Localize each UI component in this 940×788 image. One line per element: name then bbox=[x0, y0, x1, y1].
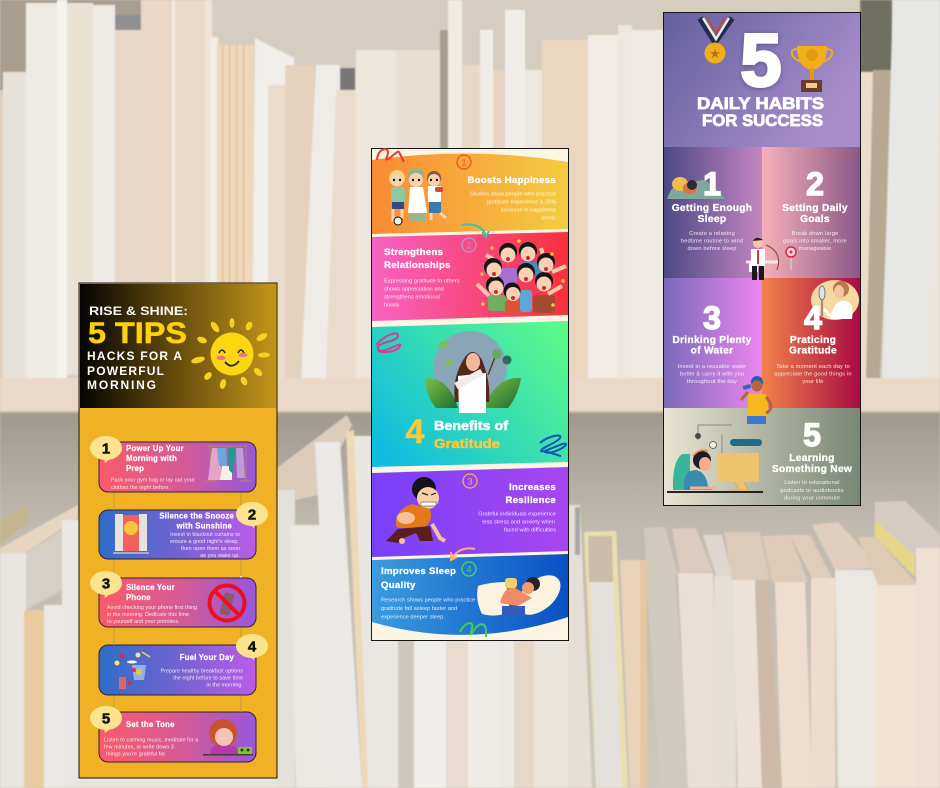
tip card 4 bbox=[99, 645, 256, 695]
habit 5: podcasts or audiobooks bbox=[780, 488, 844, 494]
habit 5: Learning bbox=[789, 453, 835, 464]
heading: rise and shine: 5 TIPS bbox=[88, 317, 187, 350]
icon: girl with radio bbox=[203, 719, 253, 756]
icon: curtained window bbox=[113, 514, 149, 554]
heading: daily habits for success: FOR SUCCESS bbox=[702, 111, 823, 130]
habit 2 bbox=[762, 147, 860, 278]
tip card 5: things you're grateful for. bbox=[106, 752, 167, 758]
icon: no phone bbox=[210, 586, 244, 620]
heading: rise and shine: HACKS FOR A bbox=[87, 349, 182, 363]
number badges bbox=[90, 436, 268, 733]
lower wall bbox=[0, 413, 940, 788]
icon: woman with mirror bbox=[811, 280, 859, 320]
band: increases resilience: faced with difficulties bbox=[504, 528, 556, 534]
decorative scribbles and arrows bbox=[377, 149, 489, 637]
scribble green bbox=[460, 623, 486, 637]
habit 2: Break down large bbox=[792, 231, 838, 237]
number circles bbox=[457, 155, 477, 576]
band: strengthens relationships: Expressing gratitude to others bbox=[384, 278, 460, 284]
number circles: 3 bbox=[467, 476, 473, 486]
band: increases resilience: Grateful individuals experience bbox=[478, 512, 556, 518]
tip card 3: Phone bbox=[126, 593, 151, 602]
habit 4: Gratitude bbox=[789, 346, 837, 356]
band: increases resilience: Resilience bbox=[506, 495, 556, 506]
tip card 1: Power Up Your bbox=[126, 444, 184, 453]
bottom shelf centre books bbox=[372, 505, 647, 788]
tip card 4: the night before to save time bbox=[173, 676, 243, 682]
band: improves sleep quality: Research shows people who practice bbox=[381, 598, 475, 604]
habit 2: manageable bbox=[799, 246, 831, 252]
header band bbox=[80, 284, 276, 408]
decorative scribble pink bbox=[376, 333, 400, 352]
arrow peach bbox=[451, 548, 475, 560]
habit 3 bbox=[664, 278, 762, 408]
bottom shelf right books bbox=[644, 501, 940, 788]
habit 2: 2 bbox=[806, 166, 824, 202]
band: strengthens relationships: shows appreciation and bbox=[384, 286, 444, 292]
scribble red bbox=[377, 149, 404, 162]
habit 2: Goals bbox=[800, 214, 830, 225]
heading: rise and shine: POWERFUL bbox=[87, 364, 164, 378]
icon: three friends bbox=[389, 168, 446, 225]
illustration: learner at computer bbox=[667, 425, 763, 493]
band: strengthens relationships: Relationships bbox=[384, 260, 451, 271]
habit 5 bbox=[664, 408, 860, 505]
band: increases resilience: less stress and anxiety when bbox=[482, 520, 555, 526]
habit 5: during your commute bbox=[784, 496, 840, 502]
connector lines bbox=[113, 492, 242, 713]
band: improves sleep quality: gratitude fall asleep faster and bbox=[381, 606, 457, 612]
tip card 3: Silence Your bbox=[126, 583, 175, 592]
panel: 5 daily habits for success bbox=[664, 12, 860, 506]
band: improves sleep quality: Quality bbox=[381, 580, 416, 591]
tip card 2: Invest in blackout curtains to bbox=[170, 532, 240, 538]
band: strengthens relationships: strengthens emotional bbox=[384, 294, 440, 300]
habit 3: Invest in a reusable water bbox=[678, 364, 746, 370]
header bbox=[664, 13, 860, 147]
habit 1: 1 bbox=[703, 166, 721, 202]
tip card 4: in the morning. bbox=[206, 682, 243, 688]
illustration: sleeping person bbox=[477, 567, 568, 623]
tip card 5: Listen to calming music, meditate for a bbox=[104, 738, 198, 744]
icon: target bbox=[786, 247, 796, 270]
title: 4 benefits of gratitude: Gratitude bbox=[434, 436, 500, 451]
number badges: 4 bbox=[248, 638, 257, 656]
heading: daily habits for success bbox=[697, 94, 824, 130]
tip card 1 bbox=[99, 442, 256, 492]
habit 1: Sleep bbox=[698, 214, 726, 225]
band: increases resilience bbox=[372, 467, 568, 557]
band: boosts happiness: Boosts Happiness bbox=[468, 175, 556, 186]
habit 4 bbox=[762, 278, 860, 408]
habit 1: down before sleep bbox=[687, 246, 737, 252]
heading: rise and shine: MORNING bbox=[87, 378, 156, 392]
band: increases resilience: Increases bbox=[509, 482, 556, 493]
tip card 2: Silence the Snooze bbox=[159, 512, 234, 520]
heading: rise and shine bbox=[87, 304, 188, 392]
heading: rise and shine: RISE & SHINE: bbox=[89, 304, 188, 318]
tip card 2: then open them as soon bbox=[181, 546, 240, 552]
habit 2: Setting Daily bbox=[782, 203, 848, 214]
top shelf books bbox=[0, 0, 940, 380]
band: title and hugging woman bbox=[372, 321, 568, 467]
tip card 5 bbox=[99, 712, 256, 762]
panel: rise and shine tips bbox=[79, 283, 277, 778]
title: 4 benefits of gratitude: 4 bbox=[406, 413, 425, 451]
icon: smoothie ingredients bbox=[114, 652, 150, 689]
number circles: 2 bbox=[466, 240, 472, 250]
tip card 4: Prepare healthy breakfast options bbox=[160, 668, 243, 674]
number circles: 1 bbox=[461, 158, 467, 168]
bottom shelf left books bbox=[0, 415, 372, 788]
tip card 3: Avoid checking your phone first thing bbox=[107, 605, 197, 611]
habit 2: goals into smaller, more bbox=[783, 238, 847, 244]
tip card 2: with Sunshine bbox=[176, 522, 232, 530]
decorative scribble blue bbox=[540, 436, 566, 456]
band: boosts happiness: Studies show people who practice bbox=[470, 192, 556, 198]
habit 3: bottle & carry it with you bbox=[680, 372, 744, 378]
icon: medal: ★ bbox=[709, 46, 721, 61]
habit 5: Something New bbox=[772, 464, 852, 475]
habit 5: Listen to educational bbox=[784, 480, 840, 486]
band: improves sleep quality: experience deeper sleep. bbox=[381, 614, 445, 620]
tip card 4: Fuel Your Day bbox=[180, 653, 234, 662]
band: boosts happiness: gratitude experience a 25% bbox=[487, 200, 556, 206]
tip card 3 bbox=[99, 578, 256, 627]
icon: clothes rack bbox=[205, 446, 252, 481]
habit 3: Drinking Plenty bbox=[672, 335, 752, 346]
tip card 1: Prep bbox=[126, 464, 144, 473]
habit 5: 5 bbox=[803, 417, 821, 453]
tip card 1: Pack your gym bag or lay out your bbox=[111, 478, 195, 484]
panel: 4 benefits of gratitude bbox=[372, 148, 568, 640]
habit 3: throughout the day bbox=[687, 379, 737, 385]
band: strengthens relationships: Strengthens bbox=[384, 247, 443, 258]
band: boosts happiness bbox=[372, 153, 568, 234]
tip card 2: as you wake up. bbox=[200, 553, 240, 559]
tip card 3: in the morning. Dedicate this time bbox=[107, 612, 189, 618]
number badges: 2 bbox=[248, 506, 256, 524]
band: improves sleep quality: Improves Sleep bbox=[381, 566, 456, 577]
icon: trophy bbox=[792, 46, 832, 92]
habit 3: of Water bbox=[691, 346, 733, 356]
icon: boy drinking water bbox=[741, 376, 771, 424]
number badges: 3 bbox=[102, 576, 110, 592]
habit 1: Getting Enough bbox=[672, 203, 752, 214]
habit 1: Create a relaxing bbox=[689, 231, 735, 237]
icon: medal bbox=[700, 18, 732, 64]
tip card 1: Morning with bbox=[126, 454, 177, 463]
number circles: 4 bbox=[466, 564, 472, 574]
icon: smiling sun bbox=[190, 318, 270, 390]
arrow teal bbox=[461, 224, 489, 237]
habit 4: 4 bbox=[804, 300, 822, 336]
band: boosts happiness: increase in happiness bbox=[501, 208, 556, 214]
habit 4: your life bbox=[802, 379, 824, 385]
illustration: determined boy bbox=[386, 477, 445, 544]
tip card 3: to yourself and your priorities. bbox=[107, 619, 180, 625]
heading: daily habits for success: DAILY HABITS bbox=[697, 94, 824, 113]
icon: group of children bbox=[477, 239, 566, 314]
title: 4 benefits of gratitude: Benefits of bbox=[434, 418, 509, 433]
habit 4: Praticing bbox=[790, 335, 836, 346]
band: strengthens relationships bbox=[372, 232, 568, 321]
habit 4: Take a moment each day to bbox=[776, 364, 850, 370]
band: boosts happiness: levels bbox=[541, 216, 556, 222]
tip card 2: ensure a good night's sleep, bbox=[170, 539, 239, 545]
habit 1 bbox=[664, 147, 762, 278]
tip card 1: clothes the night before. bbox=[111, 485, 170, 491]
number badges: 5 bbox=[102, 710, 110, 728]
icon: archer bbox=[746, 238, 779, 280]
big number 5: 5 bbox=[740, 19, 782, 102]
title: 4 benefits of gratitude bbox=[406, 413, 509, 451]
shelf board bbox=[0, 378, 940, 413]
habit 4: appreciate the good things in bbox=[774, 372, 852, 378]
tip card 2 bbox=[99, 510, 256, 559]
illustration: woman hugging herself bbox=[425, 331, 521, 413]
habit 1: bedtime routine to wind bbox=[681, 238, 743, 244]
tip card 5: few minutes, or write down 3 bbox=[104, 744, 174, 750]
habit 3: 3 bbox=[703, 300, 721, 336]
number badges: 1 bbox=[102, 440, 110, 458]
band: strengthens relationships: bonds bbox=[384, 302, 400, 308]
band: improves sleep quality bbox=[372, 554, 568, 635]
icon: sleeper bbox=[667, 177, 725, 199]
tip card 5: Set the Tone bbox=[126, 720, 175, 729]
